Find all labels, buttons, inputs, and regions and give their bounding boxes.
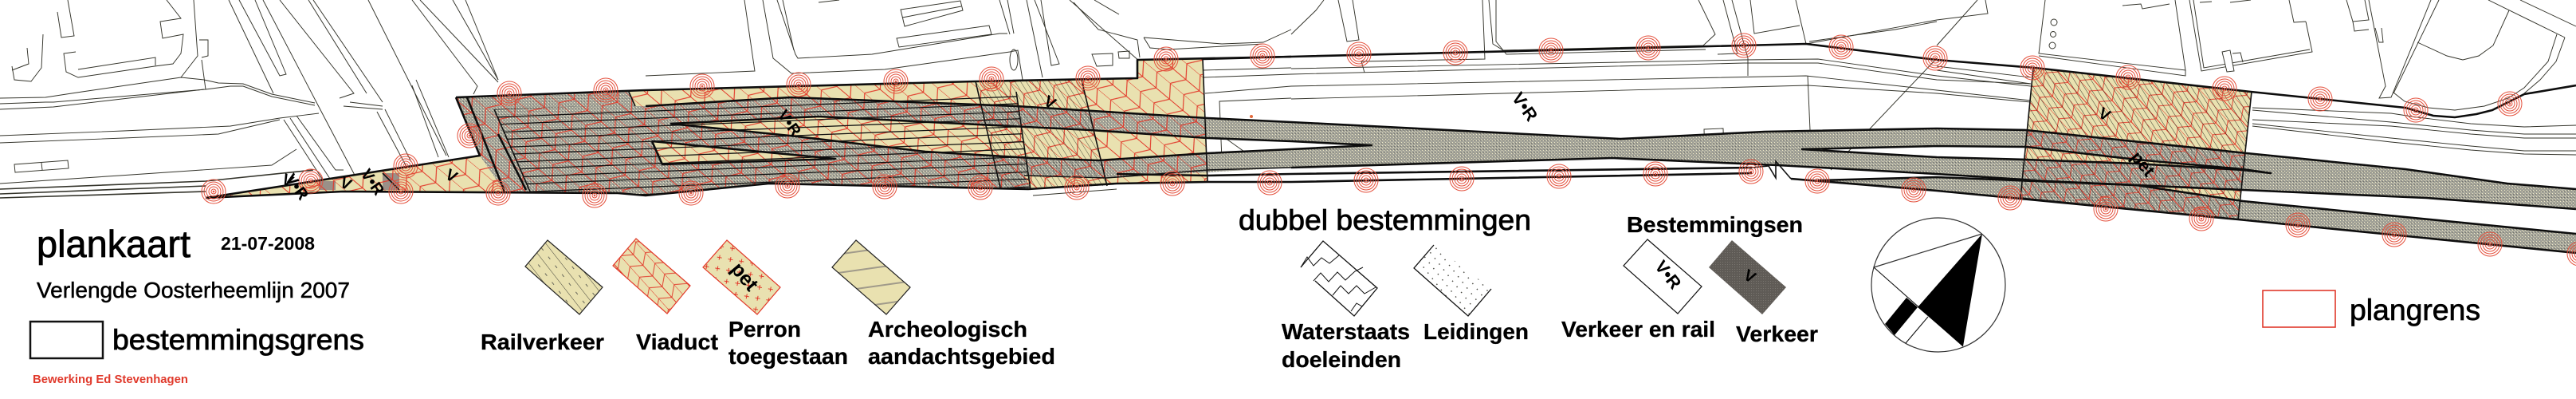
label: Verkeer: Verkeer [1736, 322, 1818, 346]
title block [30, 223, 364, 386]
legend: plan boundary [2263, 290, 2480, 327]
zone labels on map [279, 89, 2159, 204]
legend: Bestemmingsen [1561, 212, 1818, 346]
credit: Bewerking Ed Stevenhagen [33, 373, 188, 386]
label: Archeologisch aandachtsgebied: Archeologisch [868, 317, 1027, 342]
legend: rail zones [481, 239, 1055, 369]
subtitle: Verlengde Oosterheemlijn 2007 [37, 278, 350, 302]
zone labels on map: V•R [357, 166, 387, 200]
archaeological / plan boundary markers: red concentric circles [202, 34, 2576, 266]
track lines across viaduct [495, 96, 1030, 195]
swatch: Leidingen [1414, 245, 1491, 316]
zone labels on map: V [337, 174, 355, 195]
title: plankaart: plankaart [37, 223, 190, 265]
legend: destination boundary swatch [30, 322, 103, 358]
swatch: Railverkeer [525, 240, 603, 314]
label: Archeologisch aandachtsgebied: aandachtsgebied [868, 344, 1055, 369]
label: Railverkeer: Railverkeer [481, 330, 604, 354]
heading: dubbel bestemmingen: dubbel bestemmingen [1239, 203, 1531, 236]
swatch: Viaduct [613, 239, 690, 314]
label: Waterstaats doeleinden: Waterstaats [1282, 319, 1410, 344]
dense black hatch [976, 69, 2252, 219]
rail bands: grey stipple [319, 90, 2576, 253]
zone labels on map: V [1041, 93, 1059, 113]
label: Waterstaats doeleinden: doeleinden [1282, 347, 1401, 372]
swatch: Perron toegestaan: pet [726, 258, 763, 296]
planning area: cream fill with viaduct hatch [206, 59, 2252, 219]
legend: dubbel bestemmingen [1239, 203, 1531, 372]
label: Perron toegestaan: Perron [728, 317, 801, 342]
label: Perron toegestaan: toegestaan [728, 344, 848, 369]
swatch: plangrens [2263, 290, 2335, 327]
zone labels on map: V [442, 166, 461, 187]
zone labels on map: pet [2127, 148, 2159, 180]
icon: compass north arrow [1871, 218, 2005, 352]
zone labels on map: V [2095, 105, 2114, 125]
destination boundaries: heavy black lines [206, 44, 2576, 253]
swatch: Waterstaats doeleinden [1301, 241, 1377, 316]
swatch: Perron toegestaan [703, 240, 780, 314]
zone labels on map: V•R [281, 171, 312, 204]
swatch: Verkeer [1709, 240, 1786, 314]
label: Leidingen: Leidingen [1423, 319, 1529, 344]
plan map [0, 0, 2576, 266]
legend: destination boundary label: bestemmingsgrens [112, 323, 364, 356]
zone labels on map: V•R [774, 107, 804, 140]
swatch: Verkeer en rail: V•R [1651, 257, 1686, 293]
heading: Bestemmingsen: Bestemmingsen [1627, 212, 1803, 237]
label: Viaduct: Viaduct [636, 330, 718, 354]
zone labels on map: V [279, 171, 296, 192]
swatch: Verkeer: V [1741, 267, 1759, 287]
date: 21-07-2008 [221, 233, 315, 254]
base map linework: roads and buildings [0, 0, 2576, 198]
label: plangrens: plangrens [2350, 294, 2480, 326]
swatch: Archeologisch aandachtsgebied [832, 240, 910, 314]
zone labels on map: V•R [1508, 89, 1541, 125]
label: Verkeer en rail: Verkeer en rail [1561, 317, 1715, 342]
viaduct red hatch [199, 56, 2252, 219]
swatch: Verkeer en rail [1624, 239, 1702, 314]
